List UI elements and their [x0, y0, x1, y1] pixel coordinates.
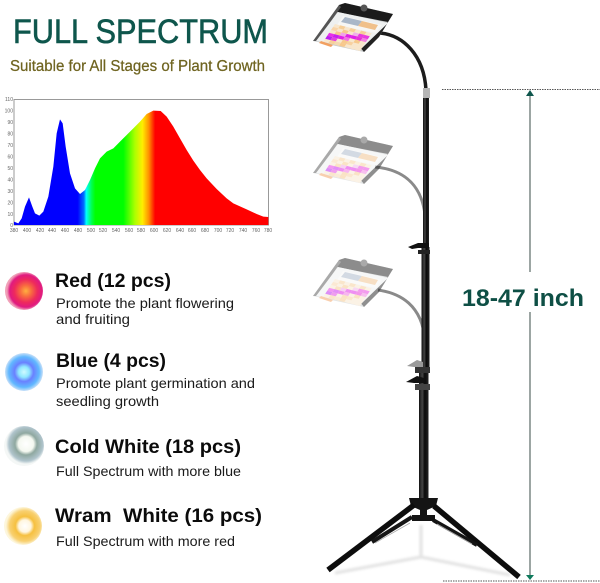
x axis labels: 440	[48, 228, 56, 234]
x axis labels: 620	[163, 228, 171, 234]
gooseneck 2	[375, 167, 425, 215]
upper clamp	[408, 243, 429, 249]
LED item: warm white: Wram White (16 pcs)	[55, 506, 262, 527]
tripod braces	[372, 517, 477, 545]
middle clamp	[407, 360, 423, 367]
LED item: red: and fruiting	[56, 311, 130, 327]
x axis labels: 480	[74, 228, 82, 234]
icon: blue LED	[5, 353, 43, 391]
title: FULL SPECTRUM	[13, 13, 268, 51]
lamp position: high	[313, 3, 393, 52]
x axis labels: 720	[226, 228, 234, 234]
x axis labels: 660	[188, 228, 196, 234]
x axis labels	[10, 228, 272, 234]
tripod hub	[409, 498, 438, 521]
LED item: blue: seedling growth	[56, 393, 159, 409]
icon: red LED	[5, 272, 43, 310]
y axis labels	[5, 97, 13, 229]
x axis labels: 380	[10, 228, 18, 234]
gooseneck 1	[380, 33, 426, 90]
x axis labels: 520	[99, 228, 107, 234]
tripod shadow	[335, 525, 510, 575]
lamp position: middle	[313, 135, 393, 184]
floor lamp stand	[328, 88, 519, 577]
LED item: warm white	[4, 506, 262, 549]
x axis labels: 540	[112, 228, 120, 234]
y axis labels: 110	[5, 97, 13, 103]
x axis labels: 640	[176, 228, 184, 234]
LED item: blue: Blue (4 pcs)	[56, 351, 166, 372]
x axis labels: 580	[137, 228, 145, 234]
gooseneck 3	[378, 290, 425, 340]
icon: cold white LED	[4, 426, 44, 466]
y axis labels: 60	[7, 154, 13, 160]
y axis labels: 30	[7, 189, 13, 195]
height dimension	[442, 90, 600, 581]
upper pole	[423, 97, 429, 247]
y axis labels: 50	[7, 166, 13, 172]
y axis labels: 90	[7, 120, 13, 126]
y axis labels: 0	[10, 223, 13, 229]
spectrum curve	[14, 111, 268, 225]
x axis labels: 600	[150, 228, 158, 234]
arrow down	[526, 312, 534, 580]
spectrum chart	[5, 97, 272, 234]
y axis labels: 20	[7, 200, 13, 206]
y axis labels: 80	[7, 132, 13, 138]
LED item: blue	[5, 351, 255, 409]
x axis labels: 680	[201, 228, 209, 234]
middle pole	[422, 247, 430, 367]
x axis labels: 780	[264, 228, 272, 234]
lamp position: low	[313, 258, 393, 307]
arrow up	[526, 90, 534, 272]
x axis labels: 500	[87, 228, 95, 234]
y axis labels: 100	[5, 108, 13, 114]
x axis labels: 760	[252, 228, 260, 234]
LED item: red: Promote the plant flowering	[56, 295, 234, 311]
lower clamp	[406, 376, 424, 383]
LED item: cold white: Full Spectrum with more blue	[56, 463, 241, 479]
silver collar	[423, 88, 430, 98]
height label: 18-47 inch	[462, 285, 584, 312]
subtitle: Suitable for All Stages of Plant Growth	[10, 58, 265, 75]
LED item: cold white	[4, 426, 241, 479]
y axis labels: 10	[7, 212, 13, 218]
LED item: red: Red (12 pcs)	[55, 271, 171, 292]
tripod legs	[328, 505, 414, 570]
icon: warm white LED	[4, 507, 42, 545]
x axis labels: 400	[23, 228, 31, 234]
LED item: blue: Promote plant germination and	[56, 375, 255, 391]
lower pole	[419, 367, 428, 499]
x axis labels: 460	[61, 228, 69, 234]
LED item: cold white: Cold White (18 pcs)	[55, 437, 241, 458]
x axis labels: 560	[125, 228, 133, 234]
x axis labels: 420	[36, 228, 44, 234]
x axis labels: 700	[214, 228, 222, 234]
x axis labels: 740	[239, 228, 247, 234]
LED item: red	[5, 271, 234, 327]
LED item: warm white: Full Spectrum with more red	[56, 533, 235, 549]
y axis labels: 40	[7, 178, 13, 184]
y axis labels: 70	[7, 143, 13, 149]
